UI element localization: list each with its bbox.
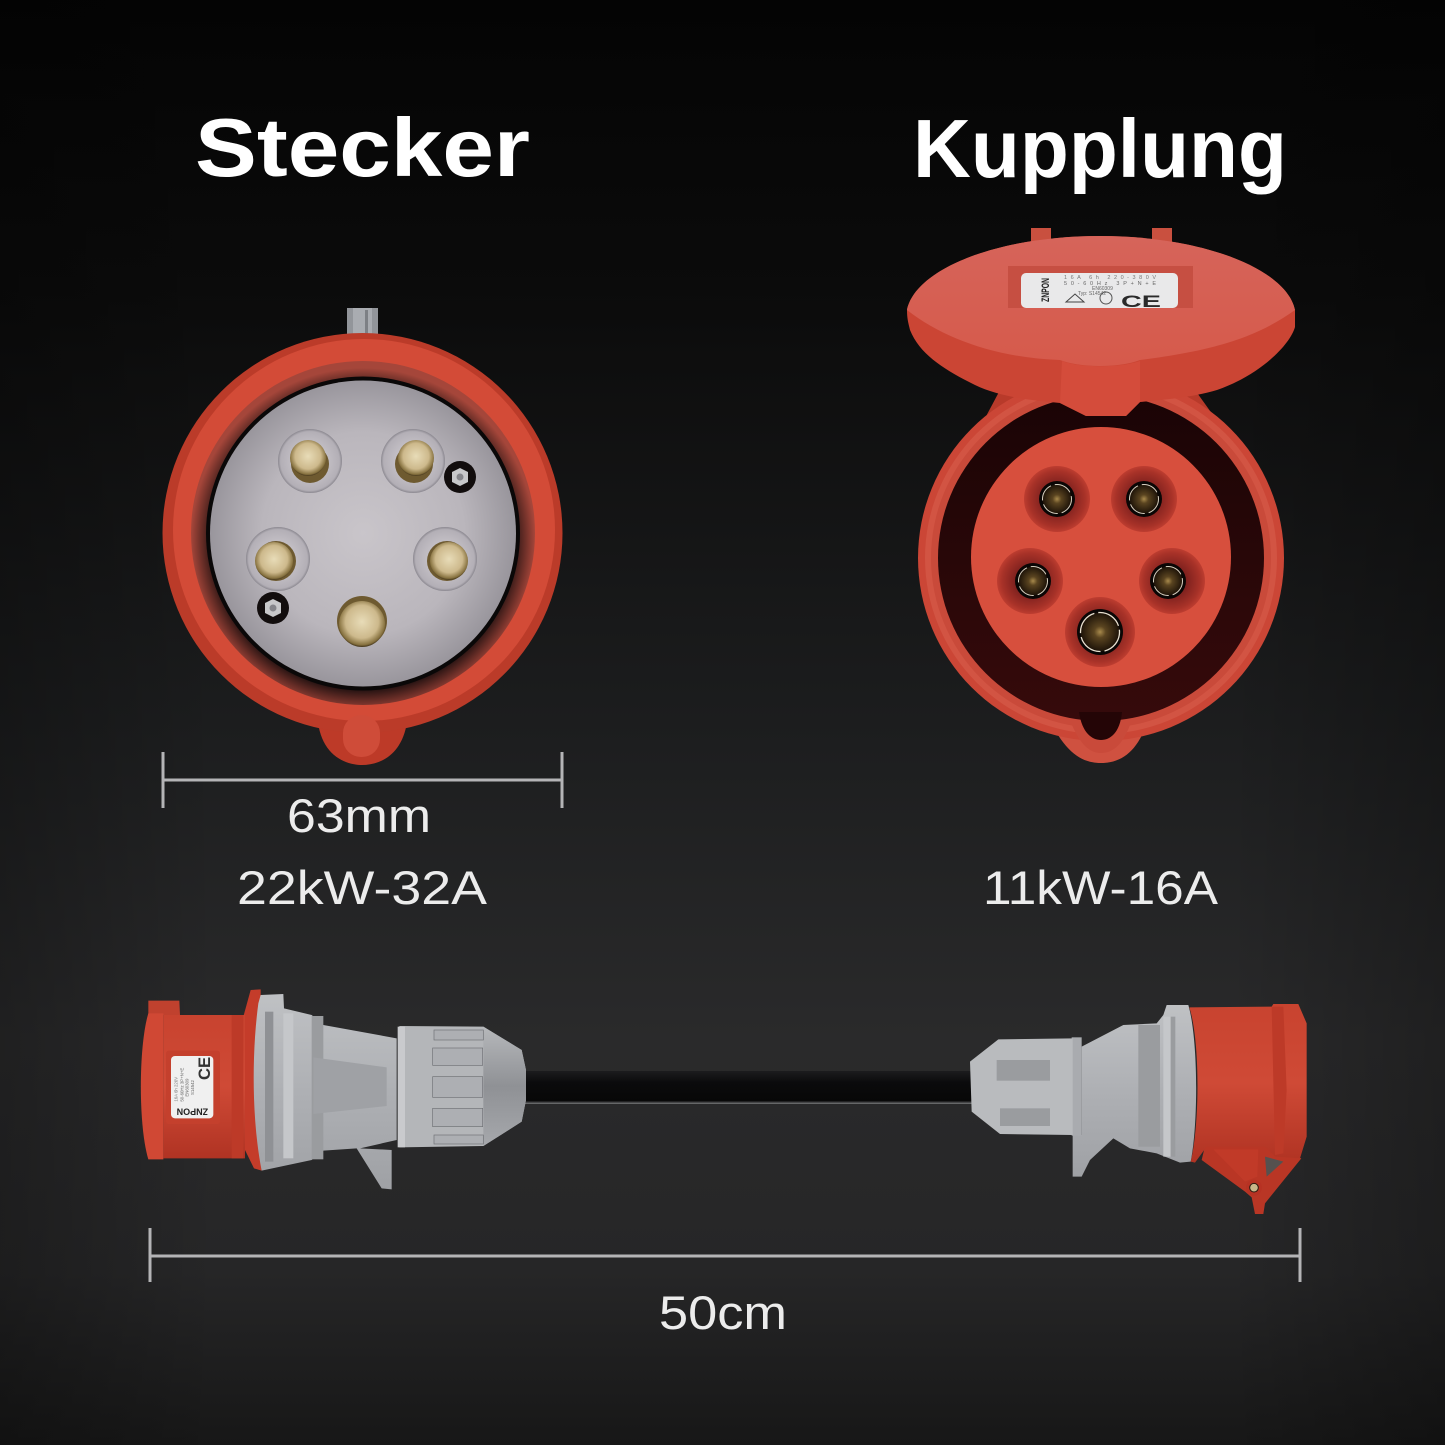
plug pin 3 (246, 527, 310, 591)
side coupler red housing (1189, 1004, 1307, 1163)
icon: side view coupler (970, 1004, 1307, 1214)
side plug label: S14542 (190, 1079, 195, 1095)
socket contact 3 (997, 548, 1063, 614)
socket dark ring (938, 395, 1264, 740)
plug pin 4 (413, 527, 477, 591)
side plug red housing (141, 989, 262, 1171)
label: 50cm: 50cm (659, 1286, 787, 1339)
label: 11kW-16A: 11kW-16A (983, 861, 1219, 914)
lid label recess (1008, 266, 1193, 308)
side plug label: EN60309 (185, 1078, 190, 1097)
socket contact 5 (1065, 597, 1135, 667)
plug inner shadow (191, 361, 535, 705)
plug pin 5 (337, 596, 387, 647)
socket contact 4 (1139, 548, 1205, 614)
heading: Kupplung: Kupplung (913, 102, 1287, 195)
lid product label (1021, 273, 1178, 311)
dimension: 50cm (150, 1228, 1300, 1282)
side plug label: CE (195, 1057, 214, 1080)
plug screw top (444, 461, 476, 493)
plug pin 2 (381, 429, 445, 493)
side plug nut (398, 1026, 526, 1147)
socket body (918, 375, 1284, 763)
side plug label: ZNPON (177, 1106, 208, 1116)
side plug label (166, 1051, 220, 1124)
lid product label: EN60309 (1092, 286, 1113, 292)
label: 63mm: 63mm (287, 789, 431, 842)
lid product label: 16A 6h 220-380V (1064, 275, 1156, 281)
side coupler nut (970, 1037, 1082, 1136)
plug bottom tab (318, 722, 407, 765)
side coupler hinged cap (1202, 1146, 1301, 1214)
lid product label: CE (1121, 292, 1161, 311)
side coupler housing band (1272, 1007, 1287, 1155)
plug pin 1 (278, 429, 342, 493)
side coupler grey collar (1073, 1005, 1196, 1177)
side plug grey collar (254, 994, 397, 1189)
socket lid (907, 228, 1295, 416)
dimension: 63mm (163, 752, 562, 808)
plug outer ring (162, 333, 562, 757)
side plug label: 16A 6h 220V (173, 1077, 178, 1102)
side plug ribs (265, 1012, 387, 1162)
icon: Stecker plug front view (162, 308, 562, 765)
plug face (206, 376, 520, 690)
socket face (971, 427, 1231, 687)
lid product label: 50-60Hz 3P+N+E (1064, 281, 1156, 287)
side plug label: 50-60Hz 3P+N+E (179, 1068, 184, 1102)
socket contact 2 (1111, 466, 1177, 532)
cable (515, 1071, 980, 1104)
socket contact 1 (1024, 466, 1090, 532)
plug screw bottom (257, 592, 289, 624)
label: 22kW-32A: 22kW-32A (237, 861, 488, 914)
plug key (347, 308, 378, 338)
heading: Stecker: Stecker (195, 101, 530, 194)
side coupler hinge pin (1246, 1180, 1262, 1196)
icon: Kupplung socket front view (907, 228, 1295, 763)
side coupler ribs (1138, 1017, 1175, 1157)
icon: side view plug (141, 989, 526, 1189)
lid product label: Typ: S14542 (1078, 291, 1106, 297)
lid product label: ZNPON (1040, 278, 1052, 302)
socket hinge arms (983, 390, 1218, 422)
